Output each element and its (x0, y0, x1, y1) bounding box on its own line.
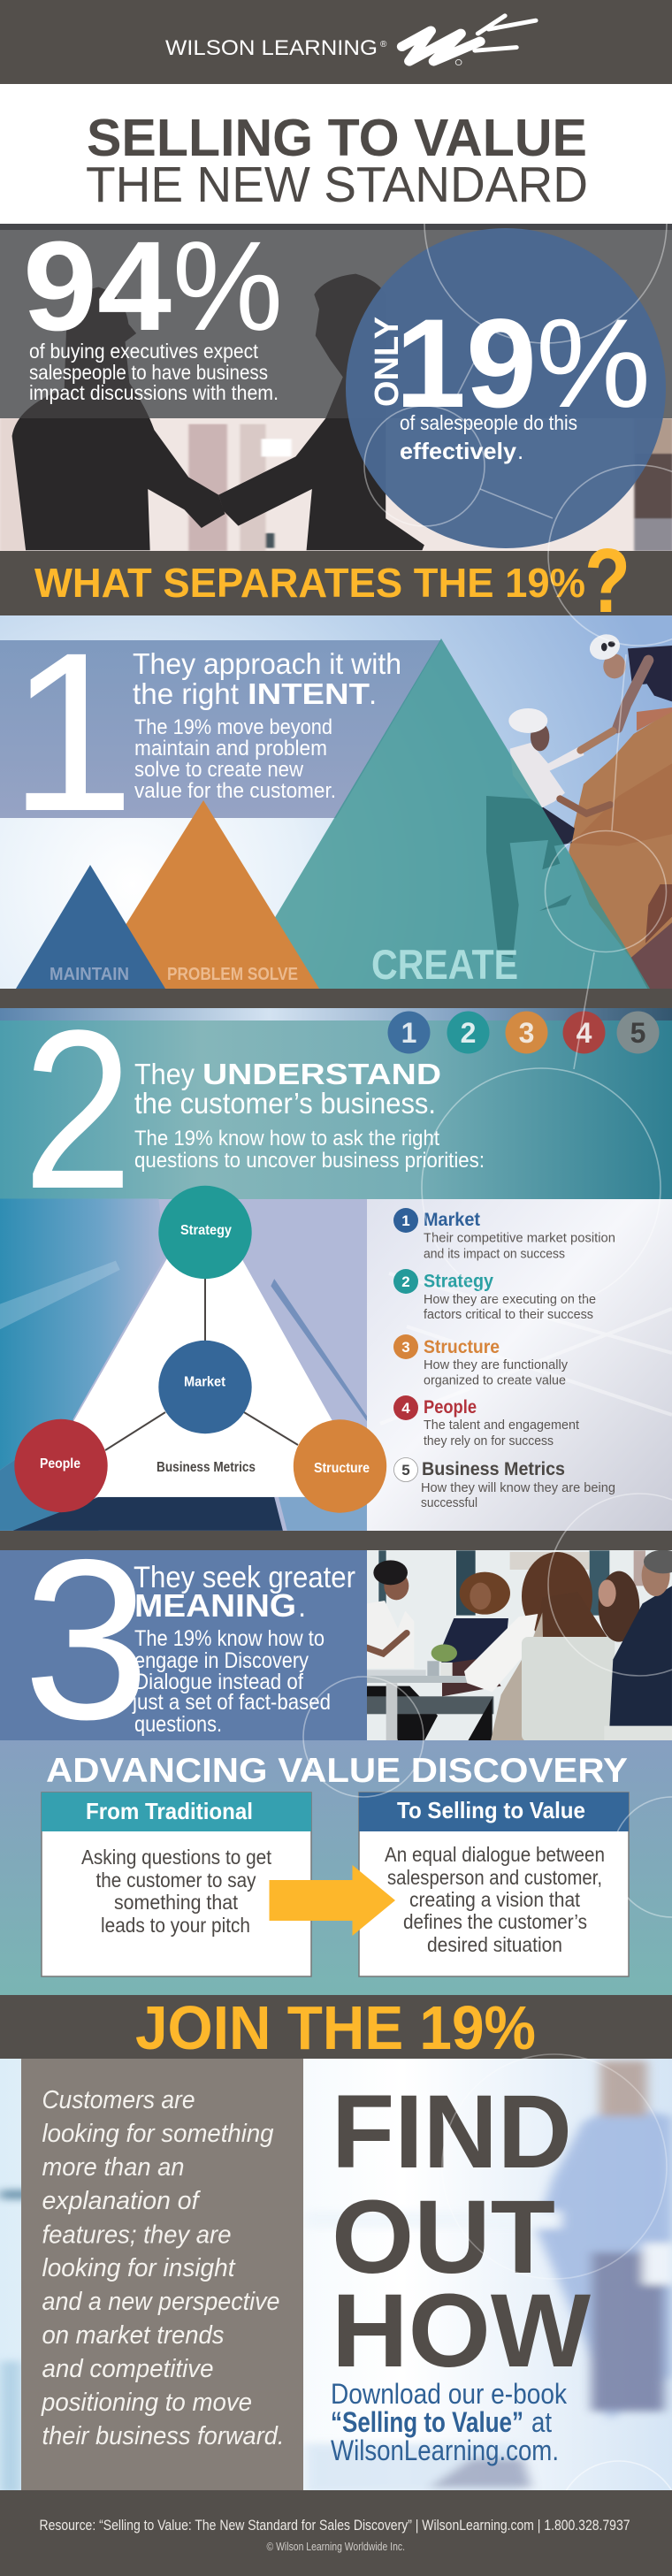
node: market: Market (184, 1374, 226, 1390)
heading: understand: UNDERSTAND (202, 1058, 441, 1090)
text: understand body: questions to uncover business priorities: (134, 1149, 485, 1173)
number 3: 3 (23, 1511, 150, 1767)
big words find out how: FIND (332, 2074, 572, 2190)
heading: understand (134, 1058, 441, 1120)
download text: WilsonLearning.com. (331, 2435, 559, 2466)
left woman (367, 1601, 414, 1669)
item: business metrics (394, 1457, 615, 1510)
arrow (269, 1865, 395, 1936)
heading: understand: the customer’s business. (134, 1087, 436, 1120)
big stat 94%: 94 (23, 215, 172, 357)
number badges row (387, 1012, 660, 1054)
number badges row: 2 (461, 1017, 476, 1049)
item: people: 4 (401, 1400, 410, 1417)
triangle: create (275, 638, 650, 989)
item: strategy: factors critical to their success (424, 1307, 593, 1322)
card: from traditional: something that (114, 1891, 239, 1914)
big stat 94%: % (172, 215, 283, 357)
card: to selling to value: salesperson and customer, (387, 1866, 602, 1889)
text: 94% caption: impact discussions with them. (29, 381, 279, 404)
label: business metrics: Business Metrics (157, 1460, 256, 1475)
text: intent body: value for the customer. (134, 779, 336, 803)
quote text: Customers are (42, 2086, 195, 2114)
item: people (393, 1395, 580, 1449)
text: meaning body (132, 1626, 331, 1737)
table (367, 1670, 426, 1676)
quote text (41, 2086, 285, 2450)
percent sign: % (536, 294, 651, 434)
item: market: Market (424, 1210, 480, 1230)
item: structure: How they are functionally (424, 1357, 568, 1372)
connector lines (105, 1279, 298, 1450)
quote text: and competitive (42, 2355, 214, 2383)
big stat 19: 19 (395, 294, 537, 434)
woman at right (599, 1571, 639, 1642)
card: to selling to value (359, 1792, 629, 1976)
heading: right intent: . (369, 677, 377, 710)
item: business metrics: 5 (401, 1462, 410, 1479)
diagram nodes (14, 1186, 386, 1513)
heading: greater meaning (134, 1561, 355, 1624)
quote text: on market trends (42, 2321, 225, 2350)
panel: step 3 meaning (0, 1550, 672, 1740)
label: problem solve: PROBLEM SOLVE (167, 965, 298, 984)
rotated label ONLY: ONLY (369, 317, 406, 407)
item: structure: 3 (401, 1339, 410, 1356)
card: from traditional: Asking questions to get (81, 1846, 272, 1869)
text: understand body (134, 1127, 485, 1173)
node: people (14, 1419, 108, 1512)
heading band: what separates (0, 530, 672, 631)
blue text panel (0, 640, 441, 818)
quote text: looking for insight (42, 2254, 236, 2282)
card: to selling to value: An equal dialogue between (385, 1843, 605, 1866)
footer (0, 2490, 672, 2576)
number badges row: 1 (401, 1017, 416, 1049)
item: structure: Structure (424, 1337, 500, 1357)
text: understand body: The 19% know how to ask the right (134, 1127, 439, 1150)
heading: right intent (133, 647, 401, 710)
title: THE NEW STANDARD (86, 157, 588, 213)
big words find out how: OUT (332, 2179, 555, 2296)
quote text: looking for something (42, 2120, 274, 2148)
circle callout: only 19% (346, 228, 666, 548)
title (0, 84, 672, 224)
number badges row: 5 (630, 1017, 645, 1049)
item: business metrics: successful (421, 1495, 477, 1510)
title: SELLING TO VALUE (87, 109, 587, 167)
quote text: more than an (42, 2153, 184, 2182)
item: structure: organized to create value (424, 1372, 566, 1388)
circle callout: only 19%: . (517, 438, 523, 464)
decorative circles (303, 101, 672, 2576)
download text: Download our e-book (331, 2378, 568, 2410)
plant (431, 1644, 457, 1662)
number 2: 2 (23, 983, 133, 1236)
label: maintain: MAINTAIN (50, 965, 129, 984)
panel: business model diagram (0, 1199, 375, 1531)
node: market (158, 1341, 252, 1433)
grey quote panel (21, 2059, 303, 2490)
card: from traditional: From Traditional (86, 1798, 253, 1824)
item: business metrics: How they will know they are being (421, 1480, 615, 1495)
item: strategy (393, 1269, 596, 1322)
card: to selling to value: defines the customer’s (403, 1910, 587, 1933)
woman in navy (439, 1618, 508, 1664)
big words find out how (336, 2096, 591, 2367)
heading: understand: They (134, 1058, 195, 1090)
text: meaning body: just a set of fact-based (132, 1690, 331, 1715)
item: strategy: 2 (401, 1273, 410, 1290)
quote text: their business forward. (42, 2422, 285, 2450)
text: intent body: solve to create new (134, 758, 304, 782)
item: market: and its impact on success (424, 1247, 565, 1261)
text: meaning body: engage in Discovery (134, 1648, 309, 1673)
white triangle (30, 1221, 375, 1497)
card: to selling to value: desired situation (427, 1933, 562, 1956)
download text: “Selling to Value” (331, 2406, 523, 2438)
blurred office photo (0, 2060, 672, 2494)
seated woman from behind (522, 1552, 592, 1631)
panel: advancing value discovery (0, 1740, 672, 1995)
item: people: they rely on for success (424, 1433, 554, 1449)
heading: ADVANCING VALUE DISCOVERY (46, 1752, 628, 1790)
text: meaning body: Dialogue instead of (134, 1670, 303, 1694)
card: to selling to value: creating a vision that (409, 1888, 581, 1911)
number 1: 1 (9, 606, 134, 859)
item: structure (393, 1334, 568, 1388)
big stat 94% (27, 241, 279, 331)
heading: greater meaning: They seek greater (134, 1561, 355, 1594)
heading: greater meaning: MEANING (134, 1587, 296, 1624)
item: strategy: Strategy (424, 1272, 493, 1291)
text: intent body (134, 718, 334, 798)
text: 94% caption: of buying executives expect (29, 340, 259, 363)
heading band: what separates: WHAT SEPARATES THE 19% (34, 560, 585, 606)
registered mark: ® (380, 40, 387, 50)
heading band: join the 19%: JOIN THE 19% (135, 1993, 536, 2062)
download text: at (531, 2406, 552, 2438)
circle callout: only 19%: effectively (400, 438, 517, 464)
panel: step 1 intent (0, 606, 672, 990)
item: people: People (424, 1397, 477, 1418)
triangle: maintain (16, 865, 165, 989)
header band (0, 0, 672, 84)
text: 94% caption (29, 340, 279, 404)
caption: of salespeople do this (400, 411, 577, 434)
card: from traditional: leads to your pitch (101, 1914, 250, 1937)
download text (331, 2378, 568, 2466)
quote text: positioning to move (41, 2389, 252, 2417)
text: meaning body: questions. (134, 1712, 222, 1737)
panel: find out how (0, 2059, 672, 2494)
item: business metrics: Business Metrics (422, 1459, 565, 1479)
item: people: The talent and engagement (424, 1418, 580, 1433)
icon: brush W logo (402, 16, 536, 65)
heading band: what separates: ? (584, 530, 630, 631)
big words find out how: HOW (332, 2273, 592, 2389)
photo: climbers on rock (486, 631, 672, 990)
text: intent body: The 19% move beyond (134, 715, 332, 739)
text: 94% caption: salespeople to have business (29, 361, 268, 384)
quote text: and a new perspective (42, 2288, 279, 2316)
item: market: 1 (401, 1212, 410, 1229)
quote text: explanation of (42, 2187, 201, 2215)
item: market: Their competitive market position (424, 1231, 615, 1245)
node: strategy: Strategy (180, 1223, 232, 1238)
card: from traditional (42, 1792, 311, 1976)
number badges row: 4 (577, 1017, 592, 1049)
heading: greater meaning: . (298, 1590, 306, 1623)
heading: right intent: INTENT (248, 677, 370, 710)
item: market (393, 1208, 615, 1261)
item: strategy: How they are executing on the (424, 1292, 596, 1307)
text: meaning body: The 19% know how to (134, 1626, 325, 1651)
node: people: People (40, 1456, 80, 1471)
node: strategy (158, 1186, 252, 1279)
text: intent body: maintain and problem (134, 737, 327, 761)
silhouettes shaking hands (12, 274, 424, 550)
card: from traditional: the customer to say (95, 1869, 256, 1892)
node: structure: Structure (314, 1461, 370, 1476)
panel: handshake statistics (0, 215, 672, 551)
triangle: problem solve (126, 800, 319, 989)
heading: right intent: the right (133, 677, 239, 710)
card: to selling to value: To Selling to Value (397, 1797, 585, 1823)
brand name: WILSON LEARNING (165, 36, 378, 60)
copyright: © Wilson Learning Worldwide Inc. (267, 2540, 405, 2553)
white chair (522, 1637, 615, 1741)
quote text: features; they are (42, 2221, 232, 2250)
heading: right intent: They approach it with (133, 647, 401, 680)
photo: business meeting (367, 1550, 672, 1742)
divider band (0, 1531, 672, 1550)
panel: step 2 understand (0, 983, 672, 1236)
heading band: join the 19% (0, 1993, 672, 2062)
node: structure (294, 1419, 386, 1513)
panel: element list (367, 1199, 672, 1531)
number badges row: 3 (519, 1017, 534, 1049)
man at right (609, 1586, 672, 1727)
label: create: CREATE (371, 941, 518, 988)
divider band (0, 989, 672, 1008)
